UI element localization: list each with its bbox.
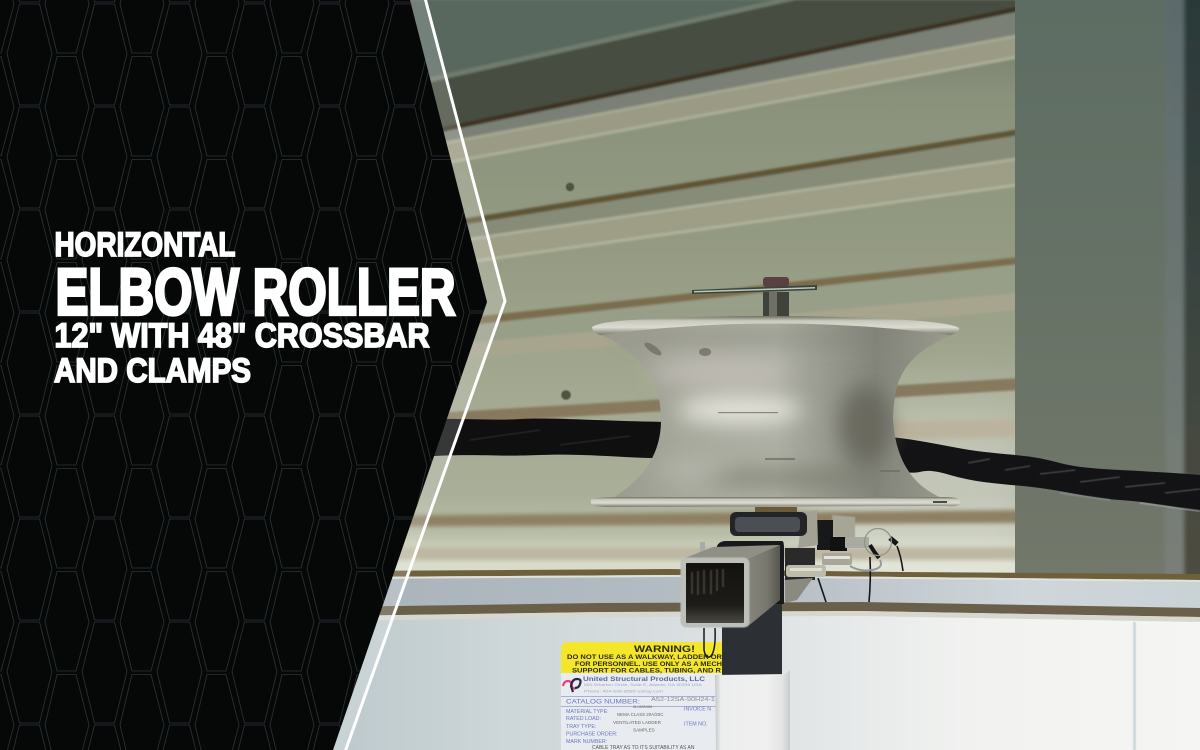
lanyard wires <box>818 538 903 602</box>
label company and fields text: 560 Wharton Circle, Suite E, Atlanta, GA 30336 USA <box>584 683 703 687</box>
title <box>54 226 456 390</box>
label company and fields text: PURCHASE ORDER: <box>566 732 618 738</box>
title line: crossbar: 12" WITH 48" CROSSBAR <box>54 317 430 355</box>
label company and fields text: Phone: 404-696-8585 ustray.com <box>584 690 663 694</box>
label company and fields text: NEMA CLASS 20A/20C <box>617 712 663 717</box>
label company and fields text: United Structural Products, LLC <box>583 676 705 683</box>
light translucent chevron band <box>333 0 505 750</box>
label warning text: DO NOT USE AS A WALKWAY, LADDER OR <box>567 654 723 661</box>
white chevron line <box>345 0 505 750</box>
label company and fields text: A52-12SA-90H24-1 <box>651 697 715 703</box>
dark chevron panel with hexagon pattern <box>0 0 487 750</box>
photo: wall with ribbed panels <box>392 0 1015 578</box>
roller bottom flange <box>591 497 960 507</box>
label company and fields text: MATERIAL TYPE: <box>566 709 609 715</box>
elbow roller <box>591 316 960 507</box>
photo: concrete column <box>1015 0 1200 580</box>
label warning text <box>567 644 723 674</box>
label company and fields text: INVOICE N <box>684 706 711 712</box>
label company and fields text: RATED LOAD: <box>566 716 601 722</box>
roller highlights and shading <box>620 332 920 487</box>
wall rivet dots <box>561 183 574 400</box>
label company and fields text: SAMPLES <box>633 728 655 732</box>
title line: horizontal: HORIZONTAL <box>54 226 236 264</box>
roller spindle and washer <box>692 277 817 317</box>
label company and fields text: MARK NUMBER: <box>566 739 607 745</box>
photo: twisted black cable <box>420 418 1200 511</box>
roller surface marks <box>643 340 947 503</box>
label company and fields text <box>566 676 715 750</box>
label company and fields text: TRAY TYPE: <box>566 724 596 730</box>
label warning text: SUPPORT FOR CABLES, TUBING, AND R <box>572 668 722 674</box>
title line: clamps: AND CLAMPS <box>54 352 251 390</box>
USP logo <box>563 679 581 692</box>
roller top flange <box>592 316 959 335</box>
label company and fields text: ALUMINUM <box>633 705 652 709</box>
label warning text: WARNING! <box>634 644 695 655</box>
title line: elbow roller: ELBOW ROLLER <box>56 254 456 328</box>
warning label <box>561 642 726 750</box>
label company and fields text: ITEM NO. <box>684 722 708 728</box>
mast tube and white sleeve <box>704 604 790 750</box>
label warning text: FOR PERSONNEL. USE ONLY AS A MECH <box>575 661 723 668</box>
square tube crossbar end <box>680 545 780 628</box>
photo: cable tray <box>330 569 1200 750</box>
label company and fields text: VENTILATED LADDER <box>613 720 662 725</box>
label company and fields text: CATALOG NUMBER: <box>566 698 640 706</box>
roller mount: bracket, pins and lanyard <box>700 507 903 604</box>
